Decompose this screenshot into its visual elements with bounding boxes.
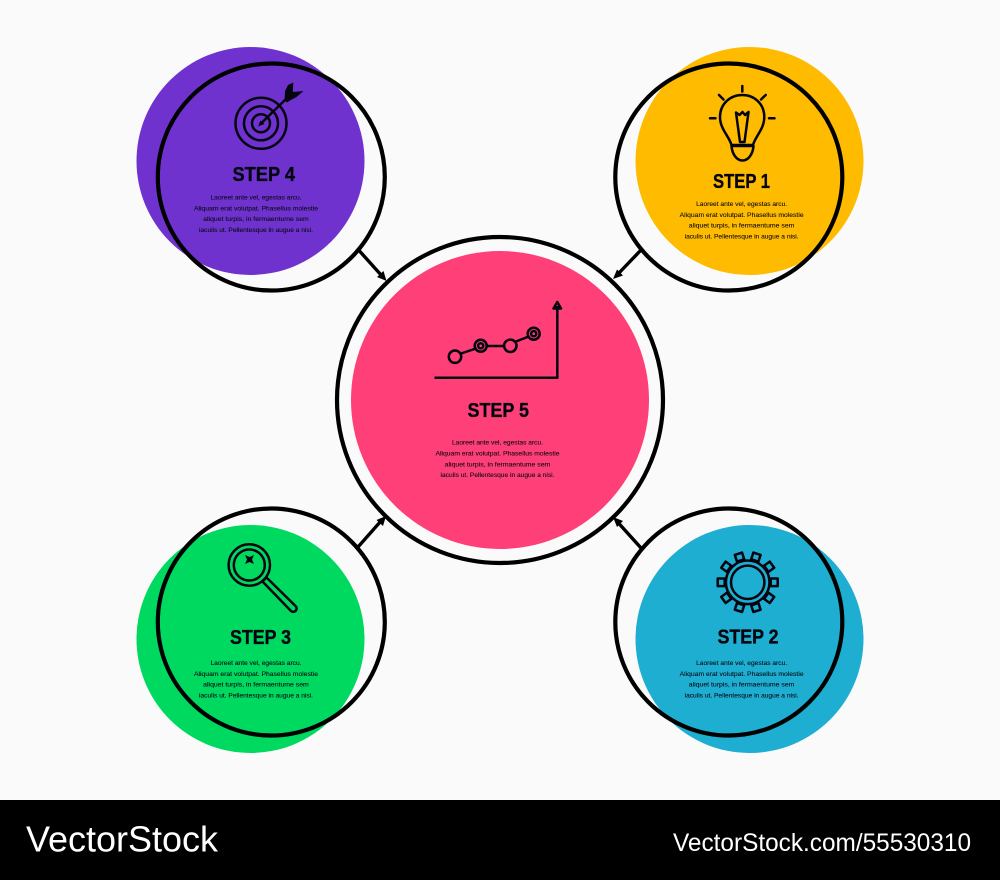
arrow: step 4 to step 5	[360, 251, 386, 281]
text block: step 3: Laoreet ante vel, egestas arcu.	[210, 660, 302, 667]
text block: step 4: iaculis ut. Pellentesque in augue a nisi.	[199, 227, 313, 234]
text block: step 2: Laoreet ante vel, egestas arcu.	[696, 660, 787, 667]
icon: light bulb	[710, 86, 774, 160]
icon: target with arrow	[236, 82, 304, 149]
heading: step 5: STEP 5	[468, 400, 529, 422]
text block: step 5: Laoreet ante vel, egestas arcu.	[452, 440, 543, 447]
text block: step 5	[436, 440, 560, 479]
text block: step 5: iaculis ut. Pellentesque in augue a nisi.	[440, 472, 555, 479]
text block: step 4: aliquet turpis, in fermaentume sem	[203, 216, 309, 223]
text block: step 2: iaculis ut. Pellentesque in augue a nisi.	[685, 692, 799, 699]
footer logo text: VectorStock	[26, 818, 219, 860]
text block: step 4: Laoreet ante vel, egestas arcu.	[210, 195, 302, 202]
text block: step 1: Aliquam erat volutpat. Phasellus molestie	[680, 212, 804, 219]
text block: step 3: aliquet turpis, in fermaentume sem	[203, 682, 309, 689]
arrow: step 3 to step 5	[358, 516, 386, 547]
heading: step 1: STEP 1	[713, 171, 770, 193]
panel: step 2	[615, 508, 864, 753]
text block: step 2	[680, 660, 804, 699]
panel: step 3	[136, 508, 385, 753]
panel: step 1	[615, 47, 864, 290]
icon: gear	[718, 553, 778, 612]
text block: step 1: aliquet turpis, in fermaentume sem	[689, 223, 795, 230]
text block: step 3	[194, 660, 318, 699]
panel: step 4	[136, 47, 385, 290]
heading: step 4: STEP 4	[232, 164, 296, 186]
text block: step 4: Aliquam erat volutpat. Phasellus molestie	[194, 205, 318, 212]
text block: step 1: Laoreet ante vel, egestas arcu.	[696, 201, 787, 208]
text block: step 1: iaculis ut. Pellentesque in augue a nisi.	[685, 233, 799, 240]
footer bar	[0, 800, 1000, 880]
text block: step 3: Aliquam erat volutpat. Phasellus molestie	[194, 671, 318, 678]
heading: step 2: STEP 2	[718, 626, 778, 648]
text block: step 3: iaculis ut. Pellentesque in augue a nisi.	[199, 692, 313, 699]
text block: step 5: aliquet turpis, in fermaentume sem	[445, 461, 551, 468]
icon: magnifying glass	[229, 544, 297, 612]
panel: step 5	[337, 237, 663, 563]
arrow: step 1 to step 5	[613, 250, 640, 279]
text block: step 4	[194, 195, 318, 234]
text block: step 2: aliquet turpis, in fermaentume sem	[689, 682, 795, 689]
icon: growth chart	[434, 302, 561, 378]
heading: step 3: STEP 3	[230, 627, 291, 649]
text block: step 5: Aliquam erat volutpat. Phasellus molestie	[436, 450, 560, 458]
text block: step 2: Aliquam erat volutpat. Phasellus molestie	[680, 671, 804, 678]
footer url text: VectorStock.com/55530310	[673, 829, 971, 857]
arrow: step 2 to step 5	[613, 517, 641, 548]
text block: step 1	[680, 201, 804, 240]
